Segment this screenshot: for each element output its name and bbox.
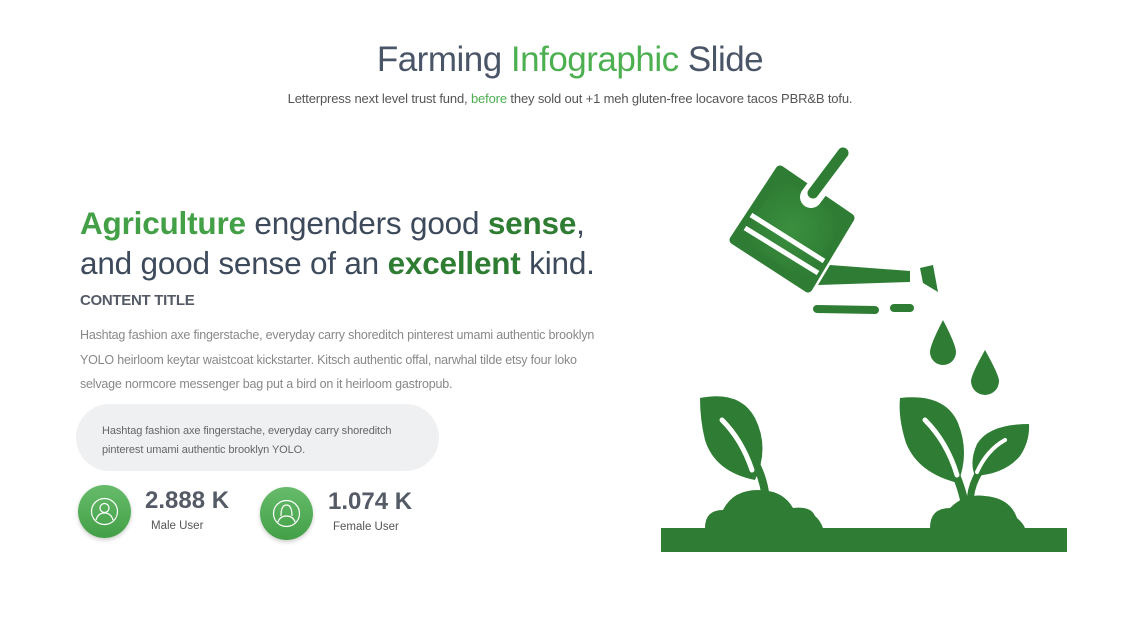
callout pill: Hashtag fashion axe fingerstache, everyday carry shoreditch pinterest umami authentic brooklyn YOLO. — [102, 425, 391, 456]
stat: male user — [76, 485, 229, 542]
stat: male user: 2.888 K — [145, 487, 229, 514]
callout pill — [76, 404, 439, 471]
title: Farming Infographic Slide — [377, 40, 763, 79]
headline: Agriculture engenders good sense, — [80, 205, 585, 241]
body text: Hashtag fashion axe fingerstache, everyday carry shoreditch pinterest umami authentic brooklyn YOLO heirloom keytar waistcoat kickstarter. Kitsch authentic offal, narwhal tilde etsy four loko selvage normcore messenger bag put a bird on it heirloom gastropub. — [80, 328, 594, 391]
icon: watering can — [734, 153, 938, 310]
stat: female user: 1.074 K — [328, 488, 412, 515]
icon: female user — [260, 487, 313, 540]
stat: female user — [258, 487, 412, 544]
stat: male user: Male User — [151, 520, 203, 532]
content title: CONTENT TITLE — [80, 292, 194, 309]
icon: male user — [78, 485, 131, 538]
icon: plants and soil — [661, 396, 1067, 552]
subtitle: Letterpress next level trust fund, before they sold out +1 meh gluten-free locavore tacos PBR&B tofu. — [288, 91, 852, 106]
headline: and good sense of an excellent kind. — [80, 245, 595, 281]
headline — [80, 205, 595, 281]
icon: water drops — [930, 320, 999, 395]
stat: female user: Female User — [333, 521, 399, 533]
